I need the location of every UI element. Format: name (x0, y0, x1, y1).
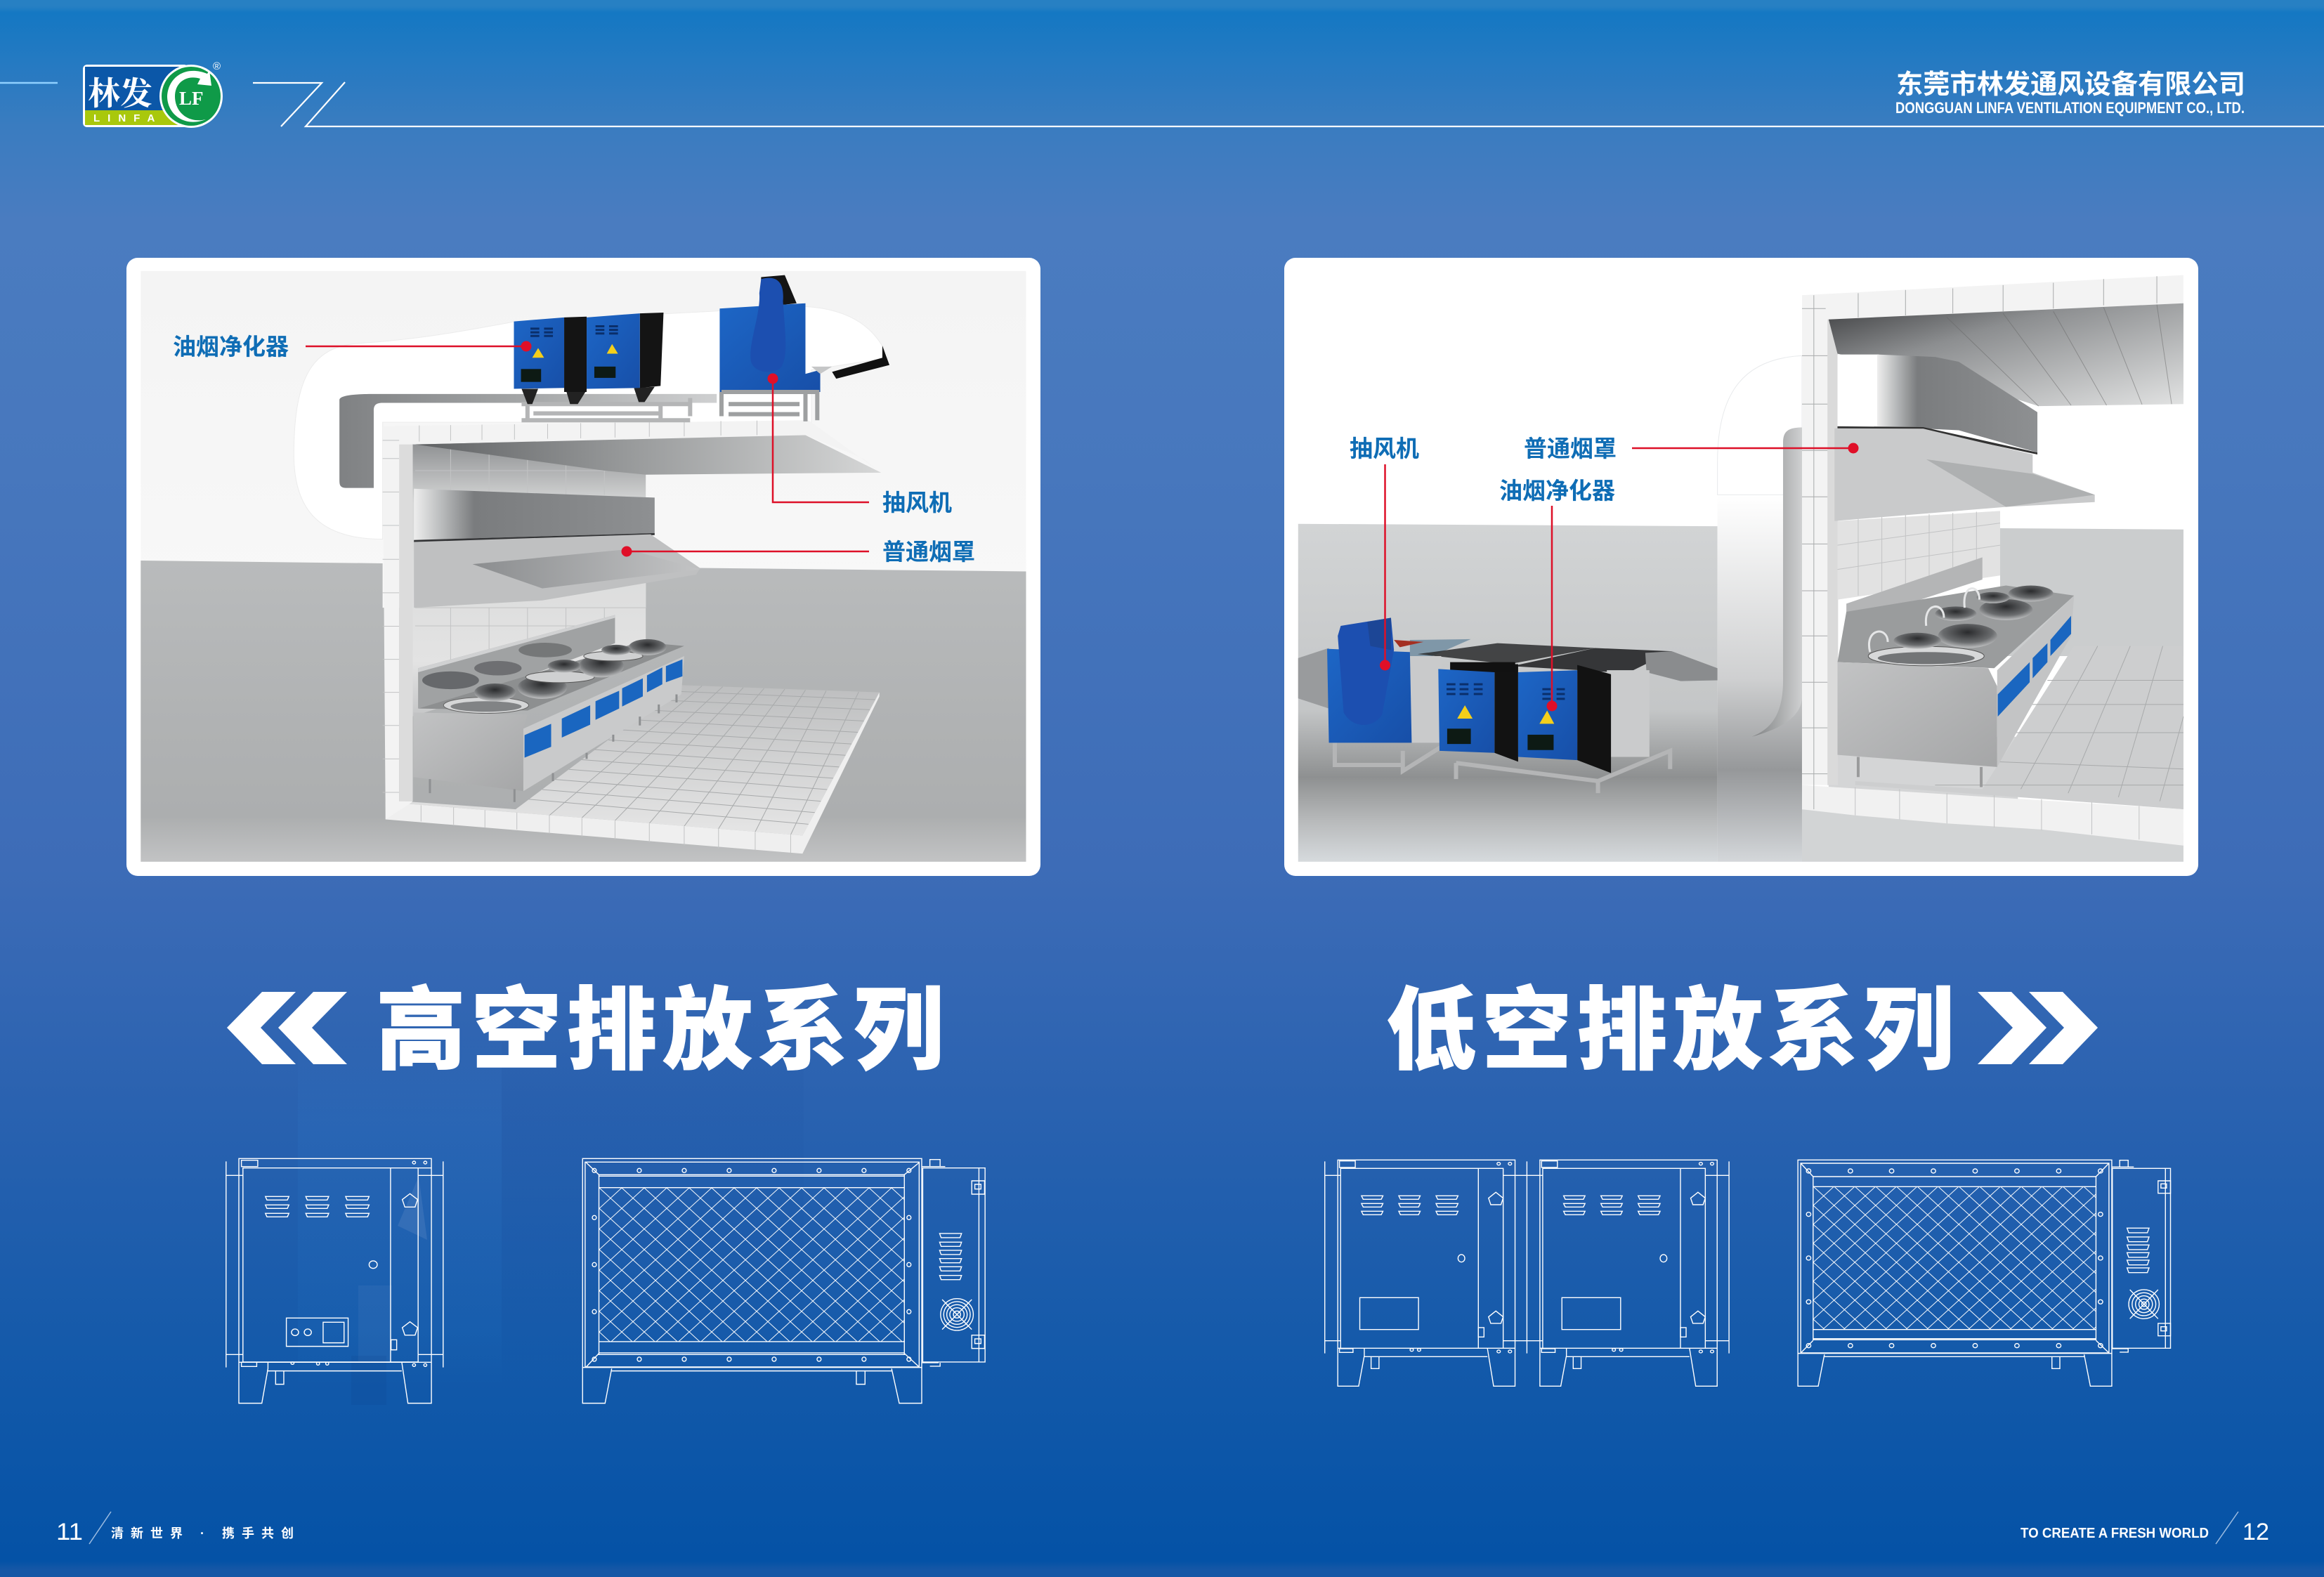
footer right: tagline and page number (2021, 1512, 2269, 1545)
callout labels right panel: 普通烟罩 (1524, 436, 1617, 462)
logo: Linfa (83, 60, 223, 128)
callout labels left panel: 普通烟罩 (882, 539, 975, 565)
header decorative slashes and rule (253, 82, 2324, 126)
column and upper slab (1802, 275, 2183, 785)
blueprint: twin unit side view with mesh (1798, 1160, 2171, 1386)
callout labels left panel: 抽风机 (882, 490, 952, 516)
company name: DONGGUAN LINFA VENTILATION EQUIPMENT CO., LTD. (1895, 99, 2245, 117)
company name: 东莞市林发通风设备有限公司 (1896, 70, 2245, 100)
footer left: page number and slogan: 清新世界 · 携手共创 (111, 1526, 294, 1540)
footer right: tagline and page number: TO CREATE A FRESH WORLD (2021, 1526, 2209, 1541)
panel: low-altitude exhaust illustration (1284, 258, 2198, 876)
blueprint: twin cabinets front view (1325, 1160, 1729, 1386)
floor tiles (1855, 646, 2183, 809)
callout labels right panel: 抽风机 (1350, 436, 1419, 462)
left duct box (1298, 648, 1329, 709)
footer right: tagline and page number: 12 (2243, 1519, 2269, 1545)
panel: high-altitude exhaust illustration (126, 258, 1040, 876)
logo: Linfa: LINFA (93, 112, 162, 124)
callout labels right panel: 油烟净化器 (1499, 478, 1615, 504)
fan unit (761, 275, 797, 307)
callout labels left panel (173, 334, 975, 565)
callout labels right panel (1350, 436, 1859, 711)
tile floor (386, 685, 880, 835)
footer left: page number and slogan: 11 (56, 1519, 83, 1545)
heading: high-altitude series: 高空排放系列 (376, 981, 944, 1081)
range (418, 615, 615, 709)
arrow: right chevrons (1978, 992, 2098, 1064)
range (1846, 557, 1983, 624)
blueprint: single cabinet front view (226, 1158, 443, 1403)
back wall tiles (412, 443, 646, 716)
hood (1838, 355, 1879, 427)
blueprint: single unit side view with mesh (582, 1158, 985, 1403)
logo: Linfa: 林发 (88, 68, 152, 114)
company name (1895, 70, 2245, 117)
tile column and top slab (383, 420, 881, 819)
fan unit (1327, 649, 1411, 742)
logo: Linfa: ® (213, 60, 221, 72)
arrow: left chevrons (227, 992, 347, 1064)
header left accent line (0, 82, 58, 84)
logo: Linfa: LF (179, 88, 204, 109)
faint ghost product left (298, 983, 804, 1405)
purifier cabinets (521, 398, 690, 421)
hood (414, 489, 655, 540)
callout labels left panel: 油烟净化器 (173, 334, 289, 360)
back tiles under hood (1838, 511, 2000, 600)
heading: low-altitude series: 低空排放系列 (1386, 981, 1954, 1081)
footer left: page number and slogan (56, 1512, 294, 1545)
cabinets (1494, 664, 1518, 761)
